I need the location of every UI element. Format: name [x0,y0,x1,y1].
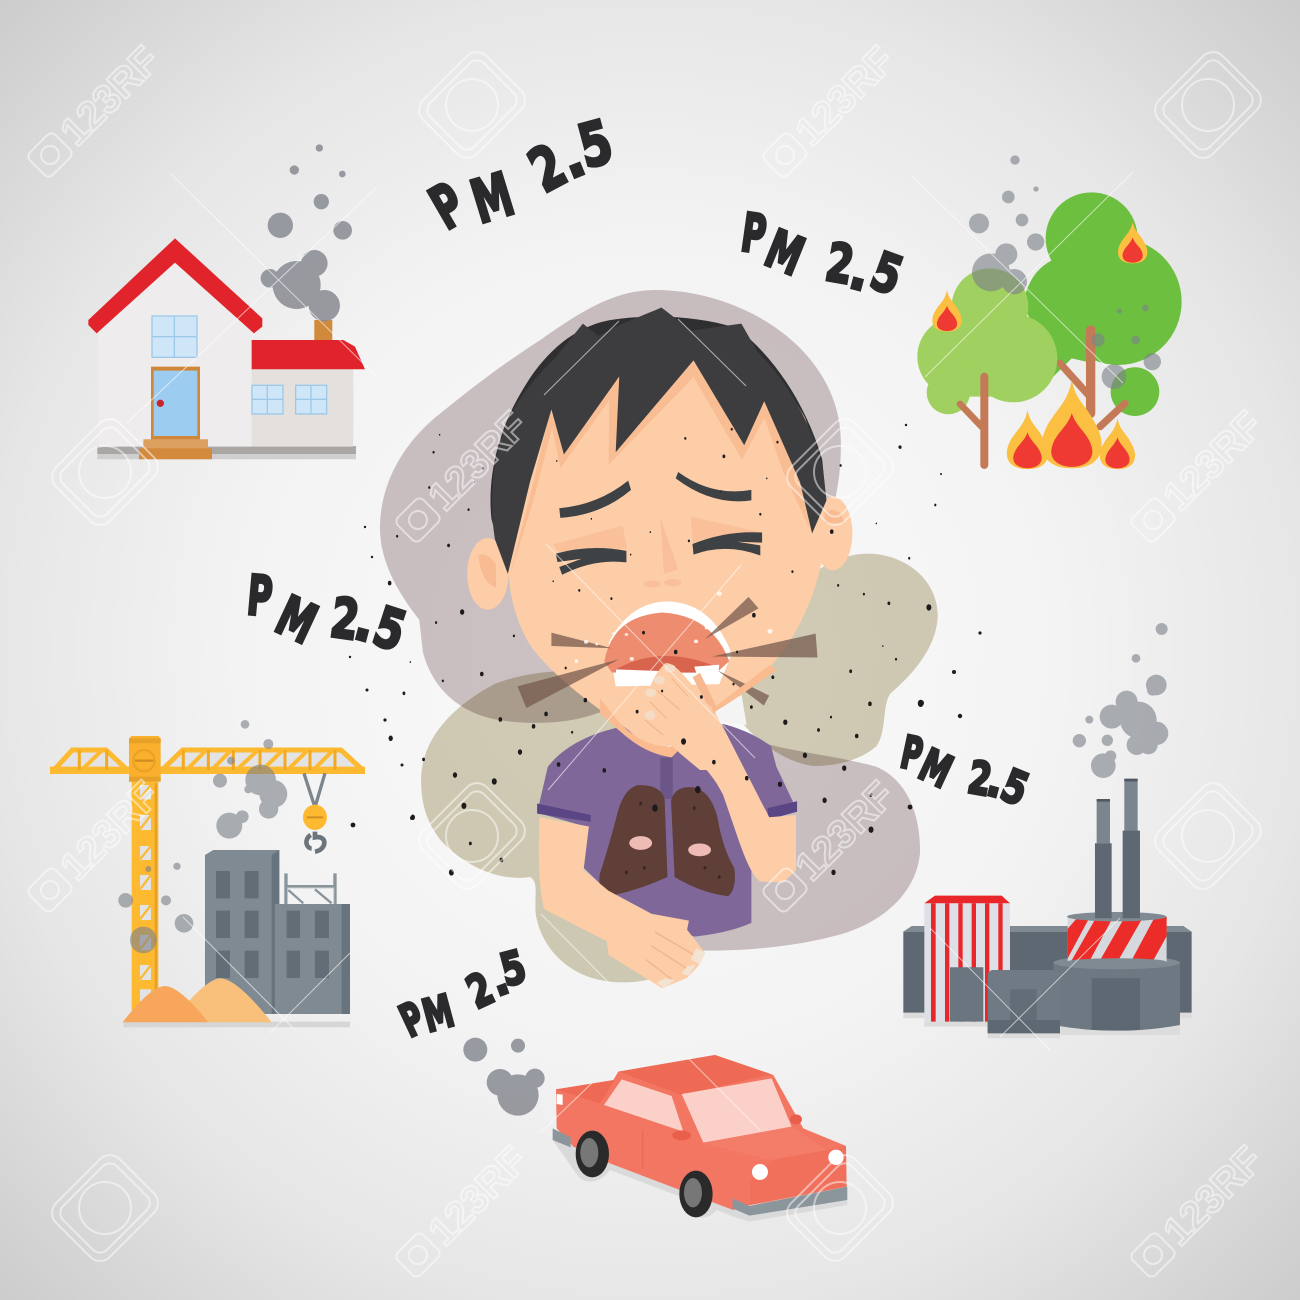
hand [643,663,742,770]
low building [275,904,350,1014]
back hair [490,317,826,556]
front trunk [960,377,984,465]
watermarks: 123RF [1155,1138,1271,1254]
lungs [599,785,735,896]
forest smoke [969,155,1161,389]
label: PM 2.5 bottom: M [417,985,459,1043]
label: PM 2.5 left: 5 [366,594,413,664]
label: PM 2.5 bottom [392,941,532,1048]
panel: central coughing boy [380,290,938,988]
PM dust particles [388,424,936,876]
pollution cloud: beige left [421,671,666,982]
crane jib [50,749,365,774]
label: PM 2.5 bottom: . [483,953,516,1007]
watermarks: 123RF [420,1138,536,1254]
shirt collar [715,695,747,725]
label: PM 2.5 right: 2 [964,752,995,807]
shirt [537,723,797,937]
tree trunks [1060,330,1125,427]
striped silo [1065,912,1168,965]
label: PM 2.5 right [896,725,1035,817]
pollution cloud: purple upper [380,290,841,723]
house door [151,367,200,440]
scattered dust particles [345,424,982,827]
icon: house with chimney smoke [88,144,365,459]
house windows [152,316,327,414]
label: PM 2.5 top: M [463,159,521,237]
hair [492,308,826,574]
house main roof [88,238,262,333]
chimney [314,320,332,343]
flame on left tree [932,290,962,332]
label: PM 2.5 left: M [267,583,326,657]
crane mast [132,782,158,1010]
label: PM 2.5 bottom: P [392,991,433,1048]
dark green tree crown [1023,192,1182,416]
label: PM 2.5 right: P [896,725,927,781]
construction smoke [118,720,287,953]
watermarks: 123RF [52,773,168,889]
face [502,337,823,747]
label: PM 2.5 upper right: . [844,239,877,303]
watermarks: 123RF [420,403,536,519]
car lights [557,1094,844,1180]
icon: construction site with crane [50,720,365,1027]
label: PM 2.5 top: P [419,169,477,243]
label: PM 2.5 top [419,107,620,243]
label: PM 2.5 left: . [348,589,383,655]
label: PM 2.5 right: M [911,739,960,798]
front block [988,970,1060,1033]
watermarks: 123RF [787,38,903,154]
finger lines [645,678,688,735]
house walls [98,262,252,447]
watermarks: 123RF [1155,403,1271,519]
side roof [252,340,365,369]
label: PM 2.5 top: . [549,121,594,193]
door steps [139,439,212,459]
open mouth [604,601,732,686]
icon: burning forest [917,155,1182,469]
label: PM 2.5 upper right: 2 [821,231,858,296]
closed eyes [556,532,762,575]
label: PM 2.5 right: 5 [994,760,1035,817]
icon: factory with smokestacks [903,623,1192,1038]
car roof and trunk [556,1055,847,1205]
house ground [97,453,356,459]
car door line [641,1130,645,1168]
pollution cloud: beige right [737,554,938,766]
fingernails [645,664,676,720]
car windows [604,1078,792,1143]
smokestacks [1095,779,1140,918]
label: PM 2.5 top: 5 [571,107,620,182]
striped tower [924,896,1010,1022]
label: PM 2.5 right: . [982,754,1010,809]
label: PM 2.5 upper right: M [757,217,813,288]
house smoke [261,144,352,321]
label: PM 2.5 left [245,564,413,664]
light green tree crown [917,268,1057,414]
small grey box [950,967,983,1022]
nose [644,518,681,588]
raised arm [669,707,796,882]
lower silo [1053,956,1180,1031]
car wheels [576,1131,713,1217]
label: PM 2.5 upper right: 5 [863,241,910,308]
ears [467,497,852,610]
hand over mouth and jaw [600,663,777,770]
scaffold [286,873,335,904]
car hood [703,1127,827,1160]
jaw band [600,665,777,757]
car exhaust smoke [463,1038,545,1116]
label: PM 2.5 top: 2 [518,131,578,207]
under-eye shade [553,516,762,552]
car bumpers [553,1128,847,1216]
crane cab [129,736,161,782]
car body [556,1055,847,1210]
site ground shadow [123,1022,350,1027]
pollution cloud: purple lower [666,744,920,951]
tall building [205,850,279,1014]
hair shadow [510,360,810,574]
label: PM 2.5 left: P [245,564,275,629]
white saliva droplets [575,591,772,663]
car mirrors [672,1114,802,1140]
factory shadow [903,1013,1192,1038]
sand piles [123,978,272,1022]
label: PM 2.5 bottom: 5 [495,941,532,997]
cough rays [517,597,817,708]
back building [903,926,1192,1013]
flame on right tree [1118,222,1147,263]
label: PM 2.5 bottom: 2 [460,963,502,1020]
label: PM 2.5 upper right: P [738,203,770,267]
watermarks: 123RF [52,38,168,154]
label: PM 2.5 upper right [738,203,910,308]
thumb [693,673,717,712]
car shadow [553,1140,847,1222]
lower arm and hand [539,817,706,988]
crane hook [303,773,327,852]
icon: red car with exhaust [463,1038,847,1222]
watermarks: 123RF [787,773,903,889]
factory smoke [1073,623,1168,778]
ground flames [1007,380,1135,469]
label: PM 2.5 left: 2 [327,587,363,653]
eyebrows [559,472,751,518]
